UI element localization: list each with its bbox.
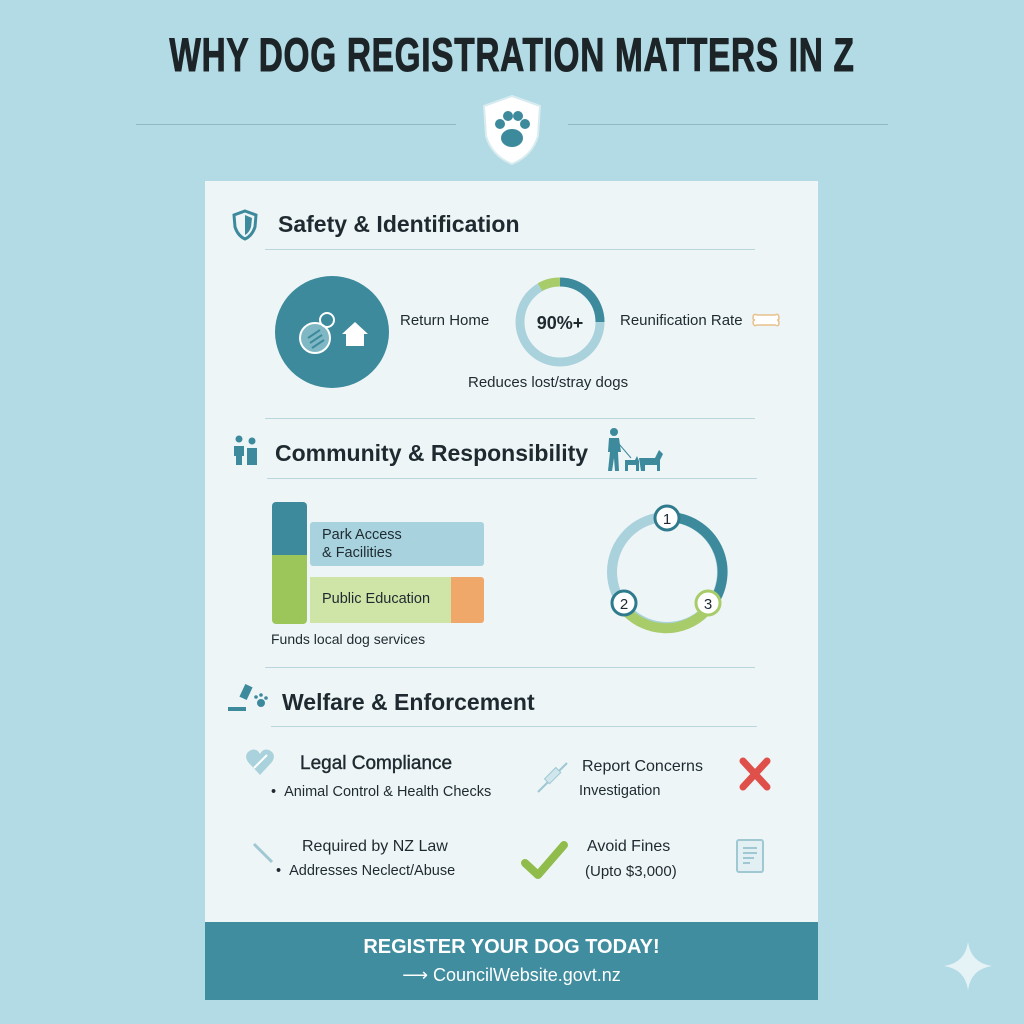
bar: park access: Park Access: [322, 527, 402, 543]
item: required by NZ law: Required by NZ Law: [302, 838, 448, 855]
icon: waste block: [451, 577, 484, 623]
section: welfare & enforcement: [228, 684, 770, 880]
icon: pen: [253, 843, 273, 863]
section: welfare & enforcement: • Addresses Neclect/Abuse: [276, 863, 455, 879]
chart: 90% donut: [516, 278, 604, 366]
icon: gavel paw: [228, 684, 268, 711]
text: reduces lost: Reduces lost/stray dogs: [468, 374, 628, 391]
chart: funding bars: [272, 502, 484, 624]
bar: park access: & Facilities: [322, 545, 392, 561]
section: welfare & enforcement: (Upto $3,000): [585, 863, 677, 880]
bar segment: teal: [272, 502, 307, 555]
text: return home: Return Home: [400, 312, 489, 329]
bar segment: green: [272, 555, 307, 624]
heading: Welfare & Enforcement: [282, 689, 535, 715]
bar: park access: [310, 522, 484, 566]
heading: Safety & Identification: [278, 211, 520, 237]
item: legal compliance: Legal Compliance: [300, 753, 452, 774]
icon: tag and house circle: [275, 276, 389, 388]
chart: cycle 1-2-3: [607, 504, 728, 634]
icon: red x: [740, 758, 770, 790]
footer banner: call to action: REGISTER YOUR DOG TODAY!: [363, 936, 660, 958]
title: WHY DOG REGISTRATION MATTERS IN Z: [169, 28, 855, 81]
heading: Community & Responsibility: [275, 440, 588, 466]
bar: public education: [310, 577, 451, 623]
text: funds local: Funds local dog services: [271, 631, 425, 647]
text: reunification rate: Reunification Rate: [620, 312, 743, 329]
chart: cycle 1-2-3: 1: [663, 511, 671, 528]
item: avoid fines: Avoid Fines: [587, 838, 670, 855]
footer banner: call to action: ⟶ CouncilWebsite.govt.nz: [402, 965, 621, 985]
item: report concerns: Report Concerns: [582, 758, 703, 775]
icon: shield paw: [483, 95, 541, 165]
icon: green check: [521, 841, 568, 879]
bar: public education: Public Education: [322, 591, 430, 607]
icon: sparkle: [944, 942, 992, 990]
chart: cycle 1-2-3: 2: [620, 596, 628, 613]
panel: main card: [205, 181, 818, 1000]
footer banner: call to action: [205, 922, 818, 1000]
icon: people: [234, 436, 257, 465]
chart: 90% donut: 90%+: [537, 313, 583, 333]
section: welfare & enforcement: Investigation: [579, 783, 660, 799]
section: welfare & enforcement: • Animal Control & Health Checks: [271, 784, 491, 800]
icon: heart: [246, 750, 274, 775]
icon: document scroll: [736, 839, 764, 873]
chart: cycle 1-2-3: 3: [704, 596, 712, 613]
section: safety & identification: [232, 209, 780, 391]
icon: syringe: [537, 762, 568, 793]
icon: bone: [752, 314, 780, 326]
icon: shield: [232, 209, 258, 241]
section: community & responsibility: [234, 428, 757, 647]
icon: person walking dogs: [608, 428, 663, 471]
